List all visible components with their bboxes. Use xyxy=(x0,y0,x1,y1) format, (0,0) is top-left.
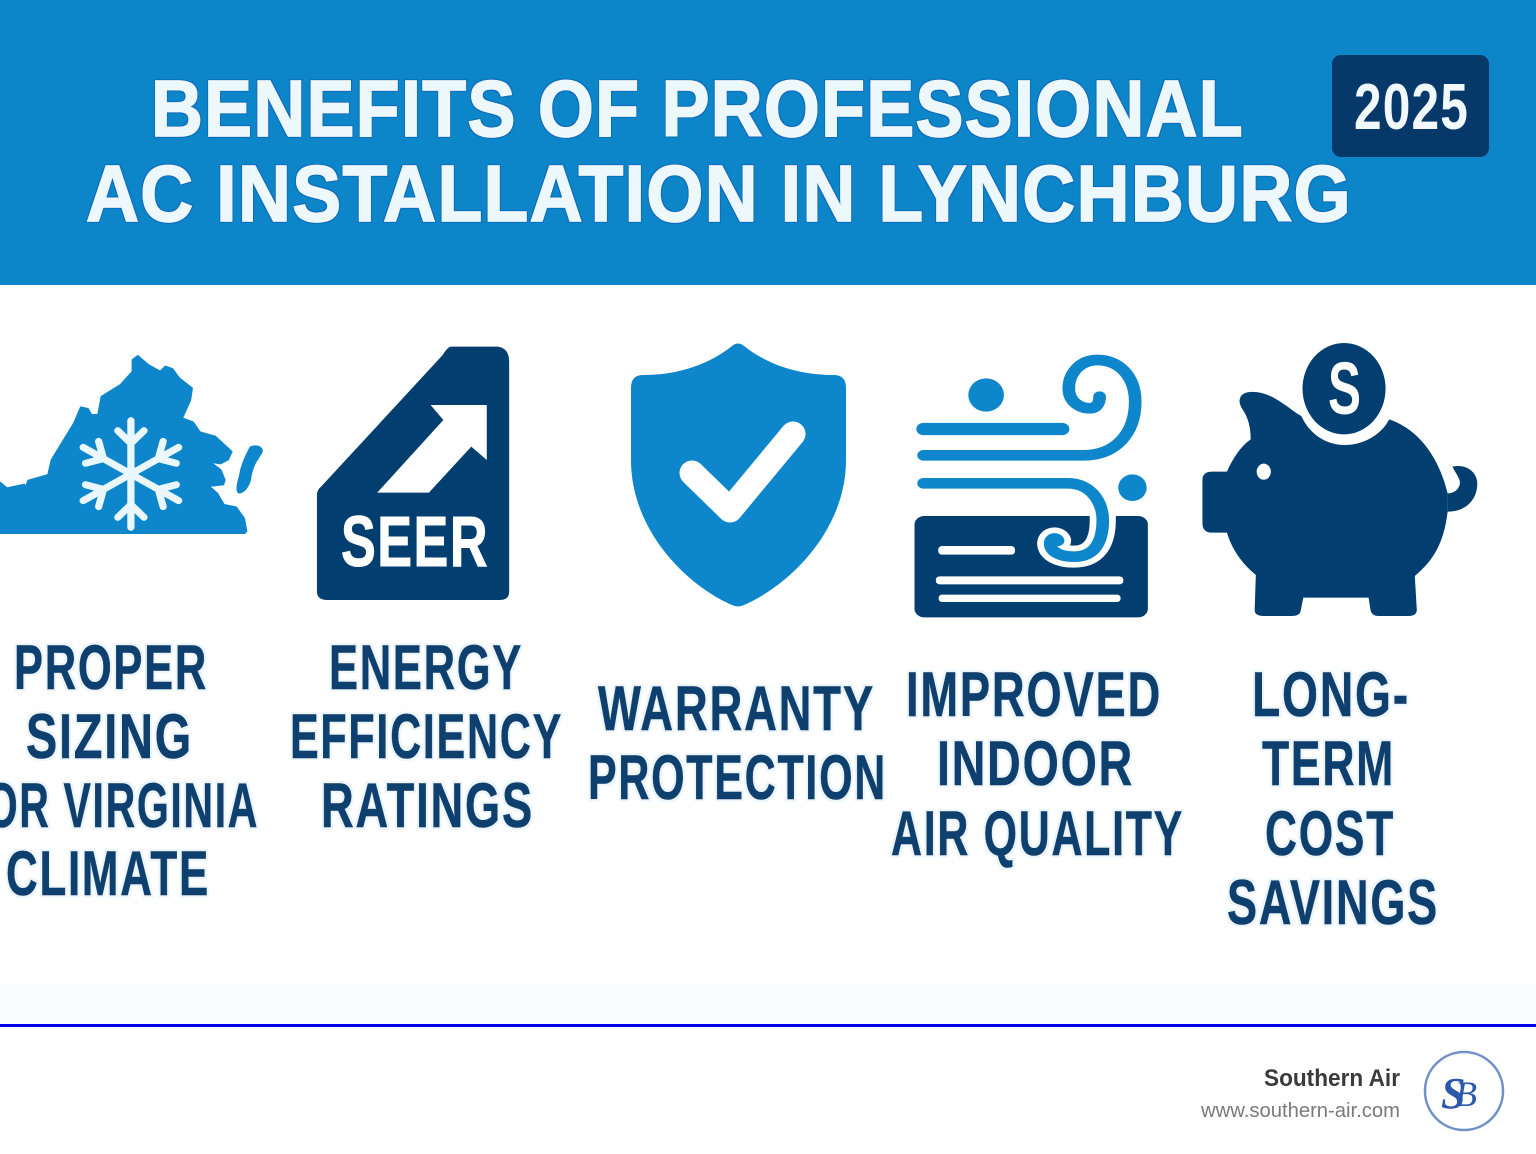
logo: S xyxy=(1441,1069,1465,1118)
panel: indoor air quality xyxy=(891,360,1184,869)
icon: piggy bank with coin xyxy=(1202,343,1477,616)
title xyxy=(86,64,1352,238)
label: warranty protection: PROTECTION xyxy=(588,743,887,813)
company website: www.southern-air.com xyxy=(1200,1100,1400,1122)
label: energy efficiency: EFFICIENCY xyxy=(290,702,563,772)
icon: piggy bank with coin: S xyxy=(1328,347,1361,430)
label: proper sizing: SIZING xyxy=(26,702,193,772)
logo xyxy=(1425,1052,1503,1130)
company name: Southern Air xyxy=(1264,1065,1400,1092)
label: proper sizing: CLIMATE xyxy=(6,839,210,909)
footer brand xyxy=(1200,1052,1503,1130)
label: energy efficiency: RATINGS xyxy=(321,771,534,841)
icon: SEER label with arrow: SEER xyxy=(341,503,489,582)
label: energy efficiency xyxy=(290,633,563,841)
icon: Virginia map with snowflake xyxy=(0,356,263,533)
label: energy efficiency: ENERGY xyxy=(329,633,523,703)
title: AC INSTALLATION IN LYNCHBURG xyxy=(86,149,1352,238)
label: warranty protection: WARRANTY xyxy=(598,674,875,744)
year badge: 2025 xyxy=(1354,70,1469,143)
icon: shield with check xyxy=(631,344,846,606)
title: BENEFITS OF PROFESSIONAL xyxy=(151,64,1244,153)
icon: air flow over AC unit xyxy=(915,360,1148,617)
panel: cost savings xyxy=(1202,343,1477,938)
panel: proper sizing xyxy=(0,356,263,909)
year badge xyxy=(1332,55,1489,157)
label: cost savings: TERM xyxy=(1262,729,1395,799)
label: indoor air quality: AIR QUALITY xyxy=(891,799,1184,869)
label: cost savings: SAVINGS xyxy=(1227,868,1439,938)
label: proper sizing: PROPER xyxy=(14,633,208,703)
icon: SEER label with arrow xyxy=(317,347,509,600)
panel: warranty protection xyxy=(588,344,887,813)
label: cost savings: COST xyxy=(1265,799,1395,869)
label: indoor air quality: IMPROVED xyxy=(906,660,1162,730)
label: warranty protection xyxy=(588,674,887,813)
logo: B xyxy=(1455,1074,1477,1114)
panel: energy efficiency xyxy=(290,347,563,841)
label: cost savings: LONG- xyxy=(1252,660,1410,730)
label: indoor air quality: INDOOR xyxy=(937,729,1134,799)
label: indoor air quality xyxy=(891,660,1184,869)
label: cost savings xyxy=(1227,660,1439,938)
label: proper sizing xyxy=(0,633,259,909)
header banner xyxy=(0,0,1536,285)
